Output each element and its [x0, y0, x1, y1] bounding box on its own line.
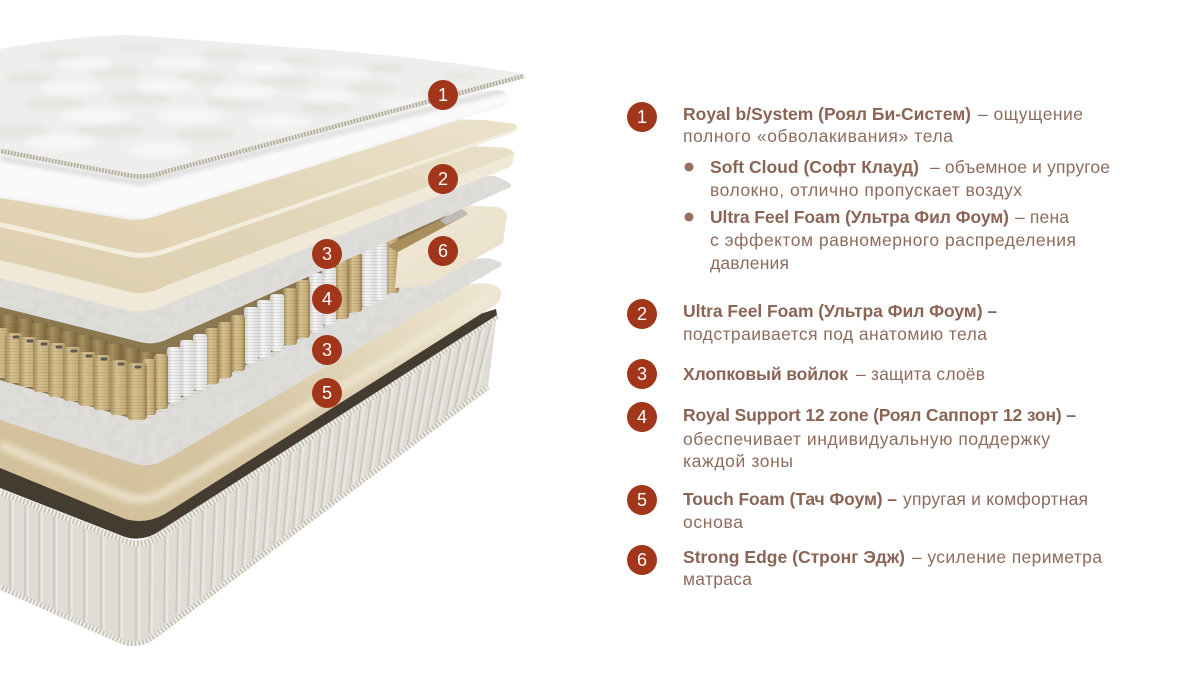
legend item 3: cotton felt: [627, 359, 985, 389]
sub-item: Ultra Feel Foam: давления: [710, 253, 789, 273]
legend item 1: Royal b/System: полного «обволакивания» тела: [683, 126, 953, 146]
marker 3 upper on illustration: [312, 239, 342, 269]
sub-item: Soft Cloud: [684, 157, 1110, 200]
spring right side row: [385, 234, 399, 293]
legend item 4: Royal Support: [627, 402, 1076, 471]
legend item 6: Strong Edge: – усиление периметра: [912, 547, 1102, 567]
cover piping: [0, 76, 524, 176]
legend item 2: Ultra Feel Foam: подстраивается под анатомию тела: [683, 324, 987, 344]
marker 4 on illustration: 4: [322, 289, 332, 309]
layer 1: quilted cover: [0, 35, 525, 176]
layer 3: lower cotton felt: [0, 258, 501, 465]
marker 6 on illustration: [428, 236, 458, 266]
base piping: [0, 316, 497, 544]
legend item 2: Ultra Feel Foam: Ultra Feel Foam (Ультра Фил Фоум) –: [683, 301, 997, 321]
legend item 1: Royal b/System: 1: [637, 107, 647, 127]
legend item 3: cotton felt: – защита слоёв: [856, 364, 985, 384]
marker 1 on illustration: [428, 80, 458, 110]
spring back rows: [0, 315, 18, 355]
legend item 6: Strong Edge: матраса: [683, 569, 752, 589]
marker 4 on illustration: [312, 284, 342, 314]
legend item 4: Royal Support: 4: [637, 407, 647, 427]
legend item 6: Strong Edge: [627, 545, 1102, 589]
marker 1 on illustration: 1: [438, 85, 448, 105]
layer 3: upper cotton felt: [0, 176, 511, 343]
layer 1b: Ultra Feel Foam thin sheet: [0, 110, 517, 258]
legend item 1: Royal b/System: Royal b/System (Роял Би-Систем): [683, 104, 971, 124]
marker 2 on illustration: [428, 164, 458, 194]
legend item 3: cotton felt: Хлопковый войлок: [683, 364, 848, 384]
base: quilted mattress side: [0, 314, 497, 645]
legend item 5: Touch Foam: основа: [683, 512, 743, 532]
marker 3 lower on illustration: 3: [322, 340, 332, 360]
legend item 3: cotton felt: 3: [637, 364, 647, 384]
layer 2: Ultra Feel Foam thick slab: [0, 130, 514, 312]
legend item 5: Touch Foam: [627, 485, 1088, 532]
legend item 2: Ultra Feel Foam: 2: [637, 304, 647, 324]
legend item 6: Strong Edge: 6: [637, 550, 647, 570]
spring front row: [0, 328, 10, 378]
legend item 4: Royal Support: каждой зоны: [683, 451, 793, 471]
sub-item: Ultra Feel Foam: с эффектом равномерного распределения: [710, 230, 1076, 250]
legend item 6: Strong Edge: Strong Edge (Стронг Эдж): [683, 547, 905, 567]
layer 6: Strong Edge foam: [387, 205, 507, 288]
sub-item: Ultra Feel Foam: Ultra Feel Foam (Ультра Фил Фоум): [710, 207, 1009, 227]
sub-item: Ultra Feel Foam: – пена: [1015, 207, 1069, 227]
legend item 4: Royal Support: Royal Support 12 zone (Роял Саппорт 12 зон) –: [683, 405, 1076, 425]
sub-item: Soft Cloud: – объемное и упругое: [930, 157, 1110, 177]
sub-item: Soft Cloud: Soft Cloud (Софт Клауд): [710, 157, 919, 177]
legend item 2: Ultra Feel Foam: [627, 299, 997, 344]
layer 4: pocket springs: [0, 205, 465, 420]
marker 2 on illustration: 2: [438, 169, 448, 189]
legend item 5: Touch Foam: упругая и комфортная: [903, 489, 1088, 509]
layer 1a: Soft Cloud fibre: [0, 90, 510, 221]
legend item 1: Royal b/System: – ощущение: [978, 104, 1083, 124]
layer 5: Touch Foam: [0, 283, 501, 521]
marker 6 on illustration: 6: [438, 241, 448, 261]
legend item 4: Royal Support: обеспечивает индивидуальную поддержку: [683, 429, 1050, 449]
sub-item: Soft Cloud: волокно, отлично пропускает воздух: [710, 180, 1022, 200]
marker 3 upper on illustration: 3: [322, 244, 332, 264]
marker 3 lower on illustration: [312, 335, 342, 365]
legend item 1: Royal b/System: [627, 102, 1083, 146]
legend item 5: Touch Foam: Touch Foam (Тач Фоум) –: [683, 489, 897, 509]
marker 5 on illustration: 5: [322, 383, 332, 403]
legend item 5: Touch Foam: 5: [637, 490, 647, 510]
sub-item: Ultra Feel Foam: [684, 207, 1076, 273]
mattress cutaway illustration: [0, 35, 525, 645]
dark support layer: [0, 309, 497, 539]
base ribs: [10, 322, 491, 645]
marker 5 on illustration: [312, 378, 342, 408]
